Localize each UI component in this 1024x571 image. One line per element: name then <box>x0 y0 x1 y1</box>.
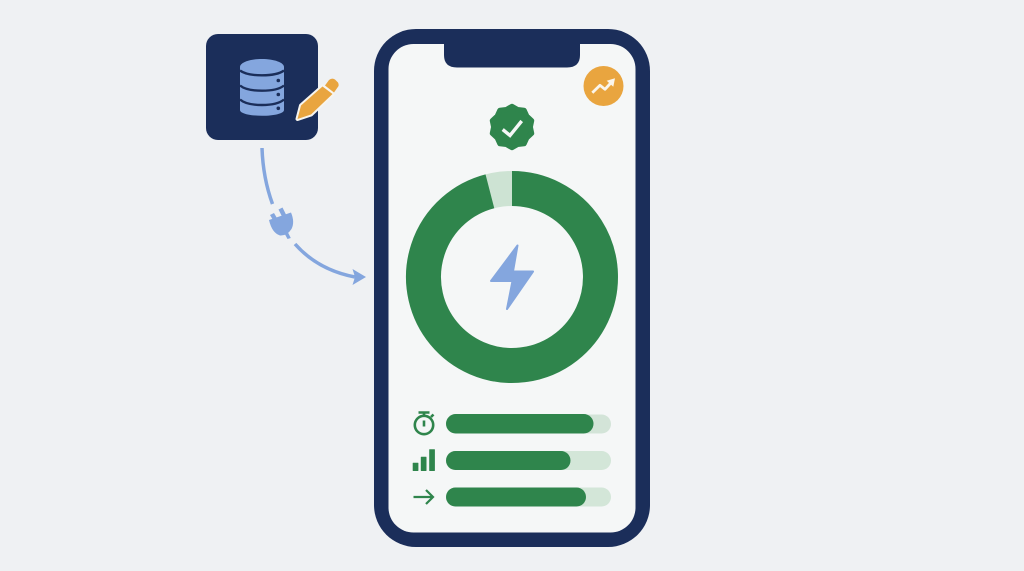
icon: stopwatch <box>415 412 434 434</box>
metric row: arrow <box>414 488 611 506</box>
progress bar: time <box>446 414 611 434</box>
phone screen <box>388 44 636 532</box>
metric row: time <box>415 412 611 434</box>
donut chart <box>423 188 600 366</box>
icon: lightning bolt <box>491 246 533 309</box>
progress bar: signal <box>446 451 611 470</box>
phone notch <box>444 43 580 68</box>
icon: plug <box>269 208 293 239</box>
progress bar: arrow <box>446 488 611 506</box>
database card <box>206 34 339 140</box>
icon: verified check badge <box>492 106 532 148</box>
icon: right arrow <box>414 490 434 504</box>
icon: pencil <box>298 79 339 119</box>
donut track segment <box>424 188 600 366</box>
card background <box>206 34 318 140</box>
phone <box>374 29 650 547</box>
phone frame <box>374 29 650 547</box>
metric row: signal <box>413 449 611 471</box>
connector line: upper <box>262 148 272 204</box>
icon: trending up badge <box>584 66 624 106</box>
icon: database <box>240 59 284 116</box>
icon: ascending bars <box>413 449 435 471</box>
connector line: lower <box>295 244 355 277</box>
arrow head <box>352 269 366 285</box>
donut value arc <box>423 188 600 366</box>
connector arrow with plug <box>262 148 366 285</box>
